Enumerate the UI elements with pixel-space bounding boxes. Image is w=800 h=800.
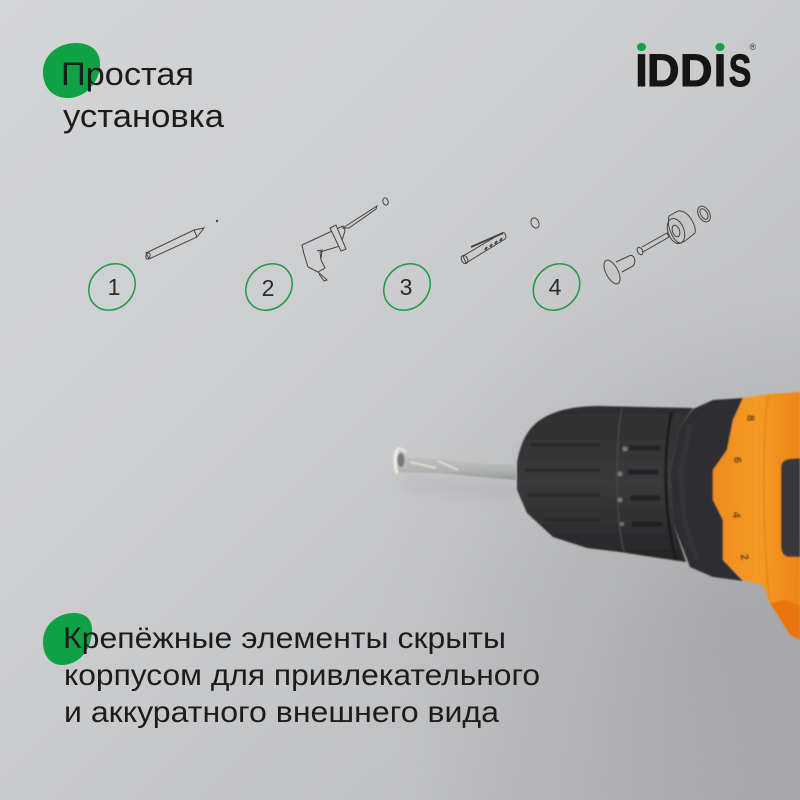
logo: IDDIS: S bbox=[729, 46, 751, 96]
step 4: fastener assembly bbox=[524, 204, 713, 320]
drill collar bbox=[670, 398, 743, 581]
logo: IDDIS: ® bbox=[750, 42, 756, 52]
caption: hidden fasteners bbox=[43, 613, 540, 729]
number badge 2: 2 bbox=[262, 275, 274, 301]
number badge 4: 4 bbox=[549, 274, 562, 300]
icon: wall plug bbox=[460, 233, 506, 265]
logo: IDDIS: I bbox=[714, 45, 726, 96]
icon: caption green blob bbox=[43, 613, 92, 665]
caption: hidden fasteners: корпусом для привлекательного bbox=[64, 659, 540, 692]
number badge 1: 1 bbox=[108, 274, 120, 300]
number badge 3: 3 bbox=[400, 274, 412, 300]
icon: drilled hole ring bbox=[382, 197, 389, 206]
number badge 3 bbox=[374, 254, 440, 320]
caption: hidden fasteners: и аккуратного внешнего вида bbox=[64, 696, 499, 729]
logo: IDDIS bbox=[635, 42, 756, 96]
step 1: marking with pencil bbox=[79, 220, 218, 320]
drill chuck bbox=[517, 406, 693, 562]
heading: simple installation: установка bbox=[63, 98, 224, 134]
drill scale numbers: 8 bbox=[744, 415, 756, 421]
number badge 2 bbox=[236, 254, 302, 320]
icon: hole ring bbox=[529, 217, 541, 229]
drill scale numbers: 6 bbox=[731, 457, 743, 463]
logo: IDDIS: D bbox=[647, 45, 680, 96]
drill scale numbers: 2 bbox=[738, 553, 750, 561]
logo: IDDIS: D bbox=[680, 45, 712, 96]
number badge 4 bbox=[524, 254, 589, 320]
icon: heading green blob bbox=[43, 43, 100, 98]
icon: mark dot bbox=[216, 220, 218, 222]
icon: hand drill bbox=[302, 206, 377, 281]
drill photo bbox=[395, 392, 800, 640]
drill scale numbers bbox=[730, 415, 756, 561]
drill scale numbers: 4 bbox=[730, 512, 742, 519]
heading: simple installation: Простая bbox=[61, 56, 194, 92]
caption: hidden fasteners: Крепёжные элементы скрыты bbox=[63, 622, 506, 655]
step 2: drilling bbox=[236, 197, 389, 320]
heading: simple installation bbox=[43, 43, 224, 134]
icon: pencil bbox=[145, 228, 204, 260]
icon: fastener parts bbox=[601, 204, 713, 286]
step 3: wall plug bbox=[374, 217, 541, 320]
logo: IDDIS: I bbox=[635, 45, 648, 96]
drill bit and hole bbox=[395, 448, 516, 498]
orange drill body bbox=[713, 392, 800, 640]
